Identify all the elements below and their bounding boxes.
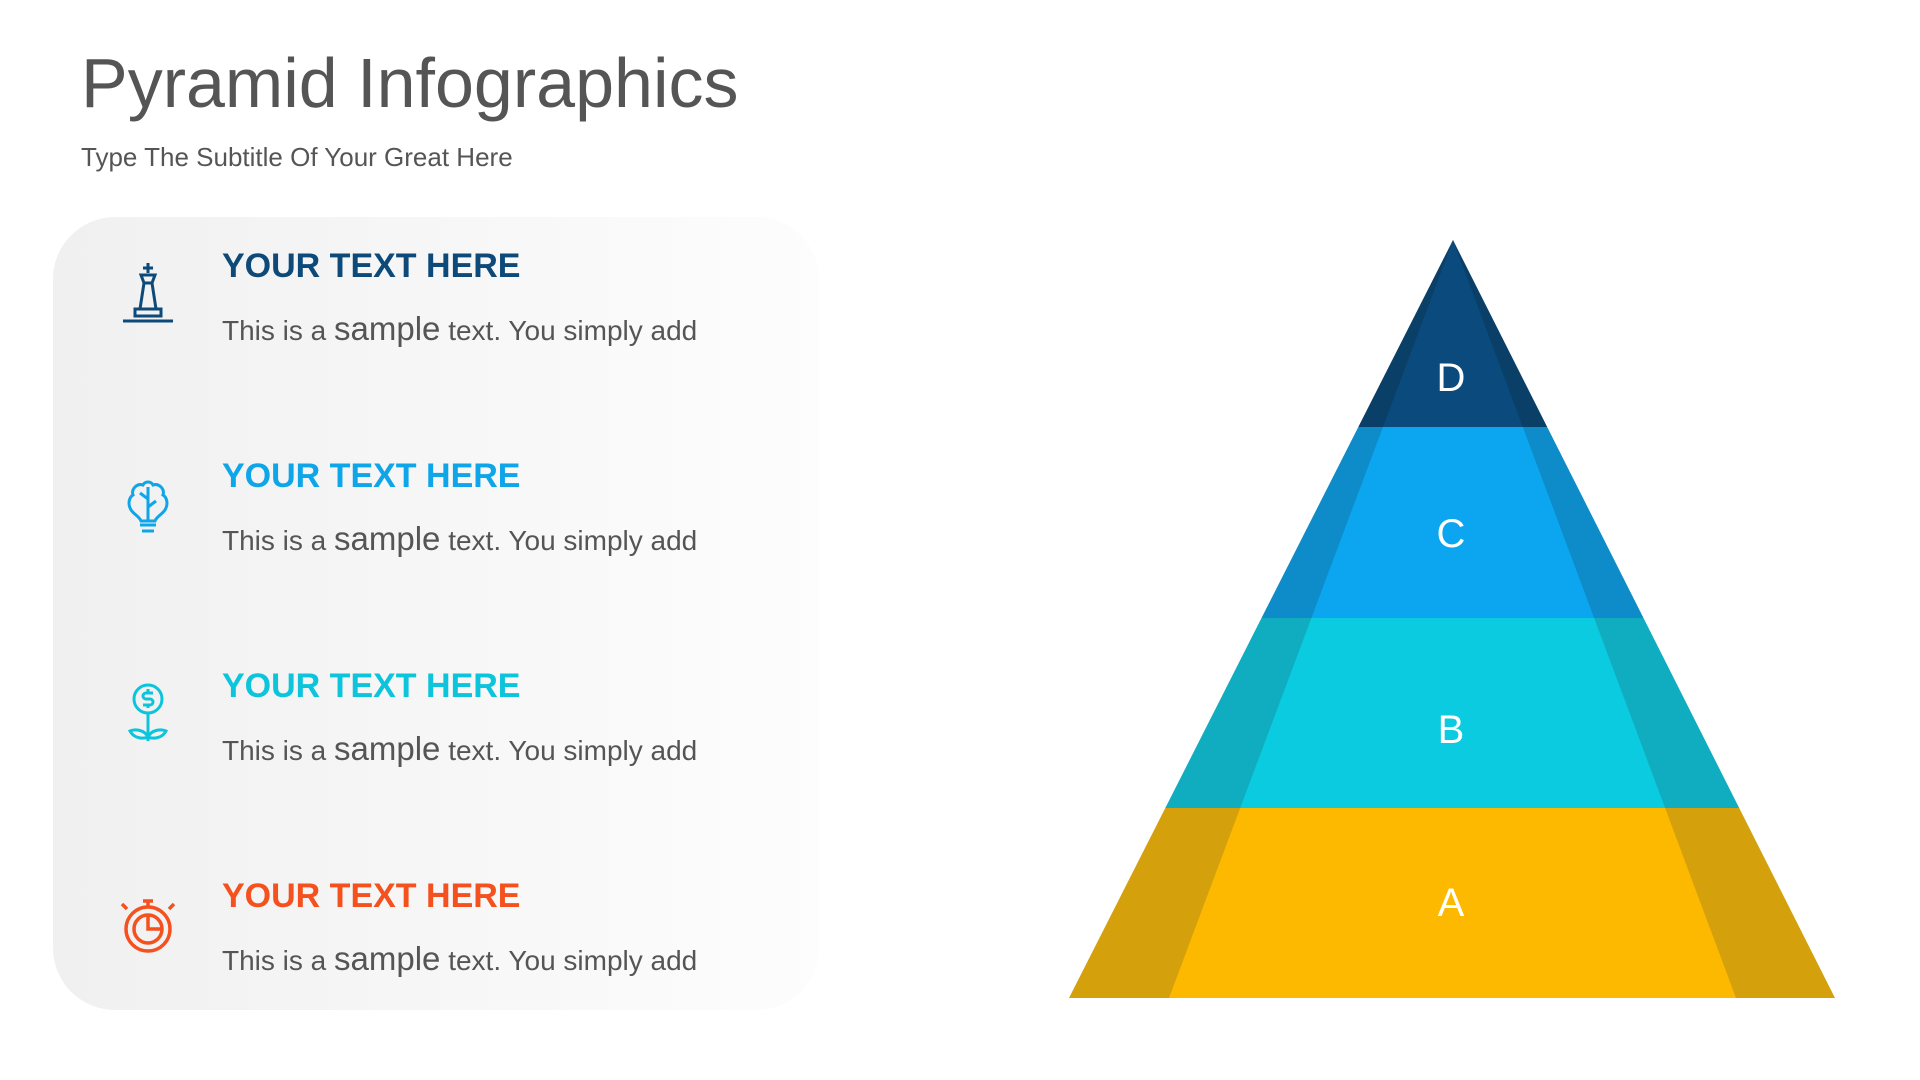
body text: This is a sample text. You simply add (222, 310, 697, 347)
row 1 (123, 247, 697, 347)
icon: chess king (123, 263, 173, 322)
icon: money plant (128, 684, 168, 741)
heading: YOUR TEXT HERE (222, 877, 520, 915)
row 2 (128, 457, 697, 557)
heading: YOUR TEXT HERE (222, 247, 520, 285)
heading: YOUR TEXT HERE (222, 667, 520, 705)
layer D (1358, 240, 1547, 427)
heading: YOUR TEXT HERE (222, 457, 520, 495)
layer B: B (1438, 708, 1464, 752)
icon: stopwatch (120, 899, 176, 953)
layer C: C (1437, 512, 1465, 556)
layer D: D (1437, 356, 1465, 400)
panel: text list (53, 217, 819, 1010)
body text: This is a sample text. You simply add (222, 520, 697, 557)
title: Pyramid Infographics (81, 44, 739, 122)
layer A: A (1438, 881, 1465, 925)
layer B (1165, 618, 1739, 808)
row 4 (120, 877, 697, 977)
body text: This is a sample text. You simply add (222, 730, 697, 767)
row 3 (128, 667, 697, 767)
icon: brain bulb (128, 480, 168, 532)
subtitle: Type The Subtitle Of Your Great Here (81, 142, 513, 172)
layer C (1262, 427, 1644, 618)
layer A (1069, 808, 1835, 998)
body text: This is a sample text. You simply add (222, 940, 697, 977)
